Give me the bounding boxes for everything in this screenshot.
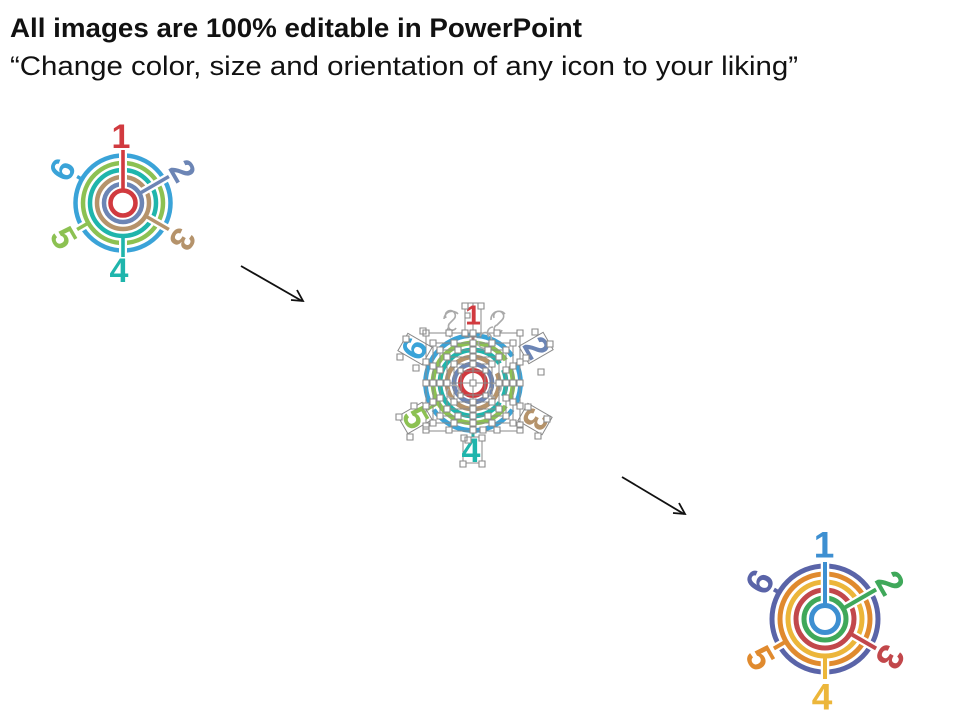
diagram: second icon with edit handles — [394, 300, 557, 470]
diagram: first concentric ring icon — [42, 118, 203, 290]
number labels — [42, 118, 203, 290]
number labels with frames: 5 — [394, 400, 436, 436]
selection frames — [426, 303, 520, 463]
number labels — [737, 524, 913, 718]
subtitle: “Change color, size and orientation of any icon to your liking” — [10, 51, 798, 81]
number labels: 2 — [161, 153, 203, 189]
arrow: second to third — [622, 477, 685, 514]
number labels: 4 — [812, 676, 833, 718]
number labels with frames: 3 — [514, 401, 556, 437]
number labels: 3 — [867, 638, 913, 676]
arrow: first to second — [241, 266, 303, 301]
number labels: 5 — [737, 639, 783, 677]
number labels: 5 — [42, 220, 84, 256]
number labels with frames: 4 — [462, 432, 481, 470]
edit marks — [444, 311, 505, 398]
number labels: 6 — [737, 563, 783, 601]
number labels: 2 — [867, 564, 913, 602]
edit handles on rings — [396, 303, 553, 467]
title: headline: All images are 100% editable in PowerPoint — [10, 13, 582, 43]
number labels: 3 — [161, 221, 203, 257]
number labels: 1 — [814, 524, 834, 566]
edit frames on digits — [398, 332, 553, 435]
number labels with frames: 1 — [465, 300, 481, 330]
number labels with frames — [394, 300, 557, 470]
diagram: third concentric ring icon — [737, 524, 913, 718]
number labels with frames: 6 — [394, 331, 436, 367]
number labels: 4 — [110, 252, 129, 290]
number labels: 1 — [112, 118, 130, 156]
number labels with frames: 2 — [515, 330, 557, 366]
number labels: 6 — [42, 152, 84, 188]
